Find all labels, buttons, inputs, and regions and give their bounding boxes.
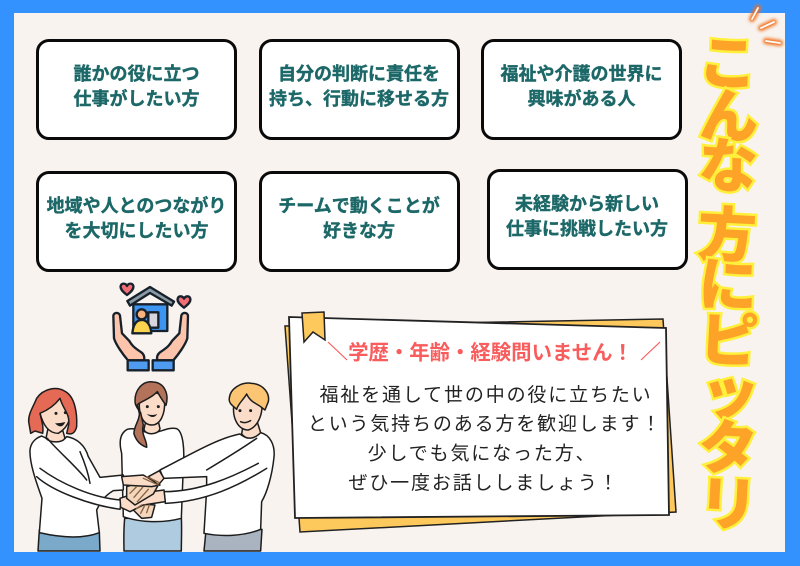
faces (54, 405, 252, 426)
card: 自分の判断: 自分の判断に責任を (278, 64, 440, 84)
card: 自分の判断 (258, 39, 460, 140)
callout body text: 少しでも気になった方、 (368, 442, 596, 464)
title: こんな方にピッタリ: ッ (699, 345, 762, 433)
callout body text: 福祉を通して世の中の役に立ちたい (319, 384, 653, 406)
card: チーム: 好きな方 (323, 221, 395, 241)
bookmark ribbon (302, 312, 325, 342)
icon: left hand (113, 313, 144, 360)
callout heading: 学歴・年齢・経験問いません！ (348, 342, 633, 364)
callout body text: という気持ちのある方を歓迎します！ (308, 413, 662, 435)
card: 誰かの役に: 仕事がしたい方 (74, 89, 200, 109)
card: 福祉や介護 (481, 39, 682, 140)
heading slashes (328, 342, 660, 360)
title: こんな方にピッタリ: タ (697, 400, 760, 488)
icon: person (137, 309, 147, 319)
card: 地域や人: を大切にしたい方 (64, 221, 208, 241)
callout panel (285, 312, 676, 532)
icon: hearts (121, 284, 190, 308)
title: こんな方にピッタリ: 方 (696, 187, 759, 275)
title: こんな方にピッタリ: ピ (698, 292, 761, 380)
title: こんな方にピッタリ: ん (698, 68, 761, 156)
person: middle woman (120, 382, 184, 551)
callout body text (308, 384, 662, 494)
callout back sheet (285, 319, 676, 532)
card: 福祉や介護: 興味がある人 (528, 89, 636, 109)
card: 未経験: 仕事に挑戦したい方 (506, 219, 668, 239)
card: 福祉や介護: 福祉や介護の世界に (500, 64, 662, 84)
card: チーム (258, 171, 460, 272)
card: 地域や人 (36, 171, 237, 272)
card: 自分の判断: 持ち、行動に移せる方 (269, 89, 449, 109)
icon: right hand (157, 313, 188, 360)
title: こんな方にピッタリ: リ (697, 456, 760, 544)
title: こんな方にピッタリ (696, 15, 762, 544)
person: right man (160, 383, 274, 551)
title: こんな方にピッタリ: な (697, 118, 760, 206)
card: 誰かの役に (36, 39, 237, 140)
person: left woman (29, 389, 123, 551)
callout front sheet (289, 317, 669, 518)
icon: hands holding house (113, 284, 190, 370)
hands stack (120, 471, 165, 518)
card: 未経験: 未経験から新しい (515, 194, 659, 214)
title: こんな方にピッタリ: に (697, 237, 760, 325)
illustration: three people joining hands (29, 382, 274, 551)
card: 地域や人: 地域や人とのつながり (47, 196, 226, 216)
callout body text: ぜひ一度お話ししましょう！ (348, 472, 620, 494)
icon: sparkle lines (752, 8, 780, 43)
icon: house (133, 304, 167, 331)
card: 未経験 (486, 169, 688, 270)
card: チーム: チームで動くことが (278, 196, 440, 216)
card: 誰かの役に: 誰かの役に立つ (74, 64, 200, 84)
title: こんな方にピッタリ: こ (697, 15, 760, 103)
